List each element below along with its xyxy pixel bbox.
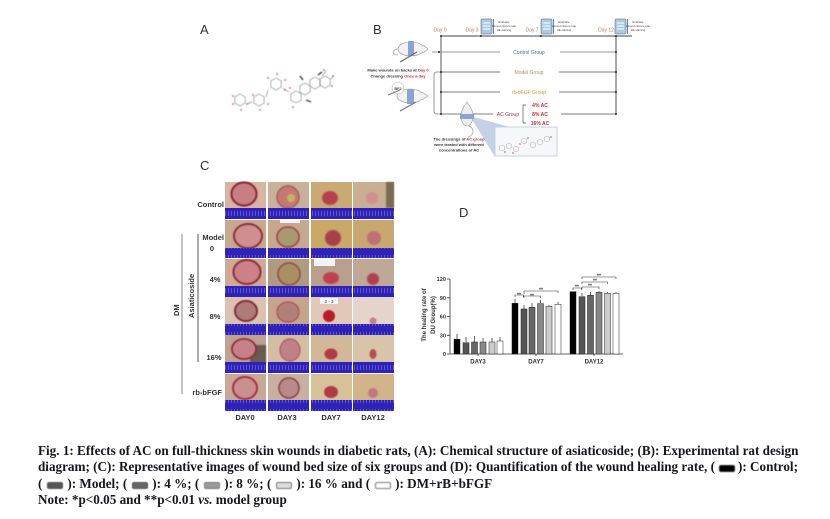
group labels for photo rows: 16% (206, 353, 222, 362)
panel label B: B (373, 22, 382, 37)
day labels: Day 12 (598, 28, 614, 34)
significance brackets: ** (588, 284, 592, 290)
row: Control (225, 182, 394, 219)
group labels for photo rows: Control (197, 200, 224, 209)
row: 16% (225, 335, 394, 373)
group labels: rb-bFGF Group (512, 90, 546, 96)
significance brackets: ** (593, 278, 597, 284)
day labels under photos: DAY3 (277, 413, 297, 422)
panel label C: C (200, 158, 209, 173)
y axis and ticks: 30 (440, 333, 446, 339)
group labels: Model Group (515, 70, 544, 76)
bars: DAY3 (454, 334, 503, 354)
caption line 3: ( ): Model; ( ): 4 %; ( ): 8 %; ( ): 16 % and ( ): DM+rB+bFGF (38, 476, 492, 491)
DM and Asiaticoside brackets: DM (172, 304, 181, 316)
significance brackets: ** (575, 284, 579, 290)
icon: clipboards with evaluation notes: HE staining (631, 28, 646, 32)
y axis and ticks (437, 277, 623, 358)
day labels: Day 0 (433, 28, 447, 34)
panel label D: D (459, 205, 468, 220)
caption line 1: Fig. 1: Effects of AC on full-thickness skin wounds in diabetic rats, (A): Chemical structure of asiaticoside; (B): Experimental rat design (38, 443, 798, 458)
group labels: AC Group (497, 112, 519, 118)
icon: clipboards with evaluation notes: Wound closure rate (552, 24, 577, 28)
panel A: chemical structure of asiaticoside (200, 22, 334, 111)
wound instructions text (367, 68, 429, 78)
group labels: 4% AC (532, 103, 548, 109)
icon: rat with wound on back (393, 41, 428, 62)
group labels for photo rows: 0 (210, 244, 214, 253)
day labels: Day 7 (525, 28, 539, 34)
AC treatment text: concentrations of AC (439, 148, 479, 152)
icon: rat receiving dressing: BF2 (394, 87, 402, 91)
bars: DAY7 (512, 299, 561, 354)
timeline and group lines (432, 35, 632, 123)
icon: rat receiving dressing (388, 82, 428, 111)
icon: clipboards with evaluation notes: Evaluate (633, 20, 644, 24)
row: 8% (225, 297, 394, 335)
y axis title line 2: DU Group(%) (431, 296, 437, 334)
wound instructions text: Change dressing Once a day (371, 74, 426, 78)
group labels: 8% AC (532, 112, 548, 118)
icon: clipboards with evaluation notes: Evaluate (559, 20, 570, 24)
icon: clipboards with evaluation notes: HE staining (557, 28, 572, 32)
icon: clipboards with evaluation notes: Wound closure rate (492, 24, 517, 28)
figure caption (38, 443, 798, 507)
day labels: Day 3 (465, 28, 479, 34)
panel label A: A (200, 22, 209, 37)
group labels for photo rows: 8% (210, 312, 221, 321)
row: rb-bFGF (225, 374, 394, 411)
DM and Asiaticoside brackets (172, 234, 198, 394)
group labels (497, 50, 550, 127)
wedge and inset chemical structure (470, 116, 557, 157)
day labels (433, 28, 614, 34)
icon: clipboards with evaluation notes (481, 19, 651, 34)
day labels under photos: DAY0 (235, 413, 255, 422)
icon: clipboards with evaluation notes: HE staining (497, 28, 512, 32)
DM and Asiaticoside brackets: Asiaticoside (187, 274, 196, 318)
group labels: 16% AC (531, 121, 550, 127)
group labels for photo rows: Model (202, 233, 224, 242)
icon: clipboards with evaluation notes: Wound closure rate (626, 24, 651, 28)
significance brackets: ** (597, 274, 601, 280)
significance brackets: ** (530, 294, 534, 300)
AC treatment text: The dressings of AC group (433, 136, 485, 142)
group labels for photo rows: 4% (210, 275, 221, 284)
x axis labels: DAY12 (585, 360, 604, 366)
row: Model 0 (225, 220, 394, 258)
caption line 2: diagram; (C): Representative images of wound bed size of six groups and (D): Quantification of the wound healing rate, ( ): Control; (38, 459, 798, 474)
chemical structure (232, 69, 334, 111)
AC treatment text: were treated with different (433, 142, 485, 147)
day labels under photos: DAY12 (361, 413, 385, 422)
row: 8%: 2 - 3 (324, 299, 334, 304)
icon: upright rat treated with AC (460, 102, 474, 137)
y axis and ticks: 90 (440, 296, 446, 302)
significance brackets: ** (517, 292, 521, 298)
AC treatment text (433, 136, 485, 152)
y axis title: The healing rate of (422, 287, 428, 342)
y axis and ticks: 120 (437, 277, 446, 283)
y axis and ticks: 0 (443, 352, 446, 358)
y axis and ticks: 60 (440, 314, 446, 320)
day labels under photos (235, 413, 385, 422)
group labels for photo rows (192, 200, 224, 397)
significance brackets: ** (539, 288, 543, 294)
bars: DAY12 (570, 291, 619, 354)
icon: clipboards with evaluation notes: Evaluate (499, 20, 510, 24)
group labels for photo rows: rb-bFGF (192, 388, 222, 397)
day labels under photos: DAY7 (321, 413, 341, 422)
panel D: healing rate bar chart (422, 205, 623, 366)
panel C: wound photographs (172, 158, 394, 422)
row: 4% (225, 259, 394, 297)
caption line 4: Note: *p<0.05 and **p<0.01 vs. model group (38, 492, 287, 507)
x axis labels: DAY3 (470, 360, 486, 366)
panel B: experimental rat design diagram (367, 19, 651, 157)
x axis labels (470, 360, 604, 366)
x axis labels: DAY7 (528, 360, 544, 366)
group labels: Control Group (513, 50, 545, 56)
significance brackets (515, 274, 616, 300)
photo grid (225, 182, 394, 411)
wound instructions text: Make wounds on backs at Day 0 (367, 68, 429, 72)
